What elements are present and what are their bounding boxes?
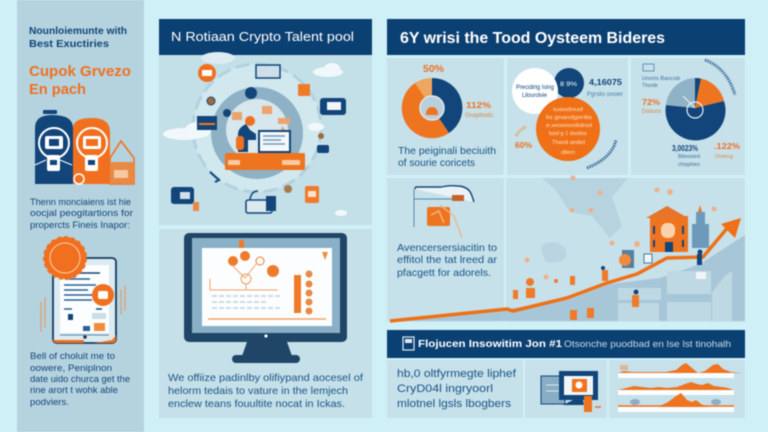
- bubble: orange: [536, 97, 600, 161]
- text block: effitol the tat lreed ar: [397, 254, 498, 266]
- bubble labels: Lilourolvie: [522, 93, 548, 99]
- text block: left middle: oocjal peogitartions for: [30, 208, 133, 218]
- text block: monitor caption: [168, 372, 363, 410]
- panel: pie stat one: [387, 58, 504, 175]
- text block: left lower: [30, 351, 130, 408]
- text block: [397, 242, 498, 279]
- text block: pfacgett for adorels.: [397, 267, 491, 279]
- panel: pie stat two: [631, 58, 745, 175]
- panel: monitor: [159, 229, 372, 418]
- text block: left middle: propercts Fineis Inapor:: [30, 220, 130, 230]
- bubble: white: [512, 68, 558, 114]
- stat: 112%: [466, 101, 491, 110]
- chart: row three: [618, 393, 734, 412]
- stat caption: Pgrsito onoier: [587, 92, 623, 98]
- stat caption second line: chrpphies: [678, 162, 700, 168]
- heading: ecosystem: 6Y wrisi the Tood Oysteem Bideres: [400, 30, 665, 47]
- bubble labels: 8 9%: [560, 81, 577, 88]
- chart: row one: [618, 363, 742, 378]
- text block: left lower: podviers.: [30, 397, 69, 408]
- icon: small card: [643, 64, 654, 71]
- icon: document and monitor: [541, 371, 601, 412]
- building: [646, 206, 688, 252]
- bubble labels: iuasdoud: [553, 107, 583, 113]
- text block: [398, 145, 496, 169]
- bubble labels: [516, 81, 592, 156]
- arcs: [516, 127, 526, 136]
- bubble labels: dlen: [561, 150, 575, 156]
- text block: CryD04l ingryoorl: [397, 383, 493, 395]
- orange heading second line: En pach: [29, 81, 86, 98]
- laptop: [258, 130, 291, 155]
- arrow: growth line: [390, 218, 741, 321]
- map markers: [524, 176, 716, 280]
- arc text: [705, 60, 735, 95]
- heading: talent pool: N Rotiaan Crypto Talent pool: [171, 29, 354, 44]
- small label: Unoris Bancob: [642, 76, 680, 82]
- text block: monitor caption: We offiize padinlby olifiypand aocesel of: [168, 372, 363, 384]
- percent label: 50%: [423, 64, 444, 75]
- chart: row two: [618, 382, 734, 395]
- bubble labels: Thand andiol: [552, 140, 585, 146]
- text block: left lower: Bell of choluit me to: [30, 351, 115, 362]
- text block: monitor caption: enclew teans fouultite nocat in Ickas.: [168, 398, 345, 410]
- bubble labels: lis gnandgeritis: [546, 115, 592, 121]
- person: [238, 124, 256, 152]
- percent label: 72%: [642, 97, 660, 107]
- tower: [692, 205, 709, 248]
- bubble labels: e,wosnoolidnol: [546, 123, 592, 129]
- desk: [225, 153, 305, 170]
- panel: bottom text: [387, 360, 523, 418]
- orange heading: Cupok Grvezo: [29, 63, 131, 80]
- percent caption: Ooteng: [715, 154, 733, 160]
- stat: 4,16075: [589, 78, 623, 87]
- bubble: navy: [554, 68, 584, 98]
- panel: audience: [387, 178, 504, 322]
- chart: pie two: [666, 78, 726, 140]
- text block: hb,0 oltfyrmegte liphef: [397, 368, 517, 380]
- bubble labels: Precidirig Ising: [516, 85, 554, 91]
- banner heading: Flojucen Insowitim Jon #1: [418, 338, 562, 350]
- icon: tablet with seal: [41, 237, 125, 343]
- clouds: [163, 52, 347, 216]
- heading: left column: Nounloiemunte with: [29, 26, 127, 37]
- panel: bottom charts: [609, 360, 745, 418]
- text block: left lower: rine arort t wohk able: [30, 385, 118, 396]
- map shapes: [542, 178, 628, 238]
- text block: [397, 368, 517, 410]
- percent label: 60%: [515, 140, 532, 150]
- text block: monitor caption: helorm tedais to vature in the lemjech: [168, 385, 348, 397]
- bubble labels: bsid g 1 dsoitos: [549, 131, 587, 137]
- map shape two: [542, 242, 567, 263]
- icon: paired devices and house: [35, 110, 134, 184]
- icon: banner badge: [403, 337, 414, 350]
- diagram: talent hub: [163, 52, 347, 216]
- text block: left middle: [30, 197, 133, 230]
- panel: bubble stat: [507, 58, 628, 175]
- text block: The peiginali beciuith: [398, 145, 496, 157]
- text block: Avencersersiacitin to: [397, 242, 497, 254]
- heading: left column second line: Best Exuctiries: [29, 39, 109, 50]
- stat caption: Bibnosied: [678, 154, 700, 160]
- text block: left lower: date uido churca get the: [30, 374, 130, 385]
- people and props: [513, 250, 706, 320]
- stat: 3,0023%: [672, 144, 698, 153]
- chart: donut one: [402, 78, 462, 138]
- text block: mlotnel lgsls lbogbers: [397, 398, 512, 410]
- banner text: Otsonche puodbad en lse lst tinohalh: [564, 339, 731, 350]
- banner: insight: [387, 330, 745, 358]
- icon: document folder: [414, 186, 474, 238]
- ground: [392, 235, 745, 321]
- header: ecosystem: [387, 19, 745, 55]
- text block: of sourie coricets: [398, 157, 475, 169]
- icon: monitor: [184, 233, 347, 363]
- text block: left lower: oowere, Peniplnon: [30, 363, 112, 374]
- percent label: .122%: [714, 141, 740, 151]
- info panels: [618, 271, 732, 321]
- panel: growth map: [390, 176, 745, 322]
- stat caption: Gnapitoids: [465, 113, 493, 119]
- header: talent pool: [159, 19, 372, 55]
- percent caption: Dooruno: [642, 109, 662, 115]
- panel: left column: [17, 0, 144, 432]
- small label second line: Thorde: [642, 83, 658, 89]
- panel: talent pool: [159, 19, 372, 225]
- orbit icons: [198, 64, 216, 82]
- panel: bottom icon: [525, 360, 607, 418]
- text block: left middle: Thenn monciaiens ist hie: [30, 197, 131, 207]
